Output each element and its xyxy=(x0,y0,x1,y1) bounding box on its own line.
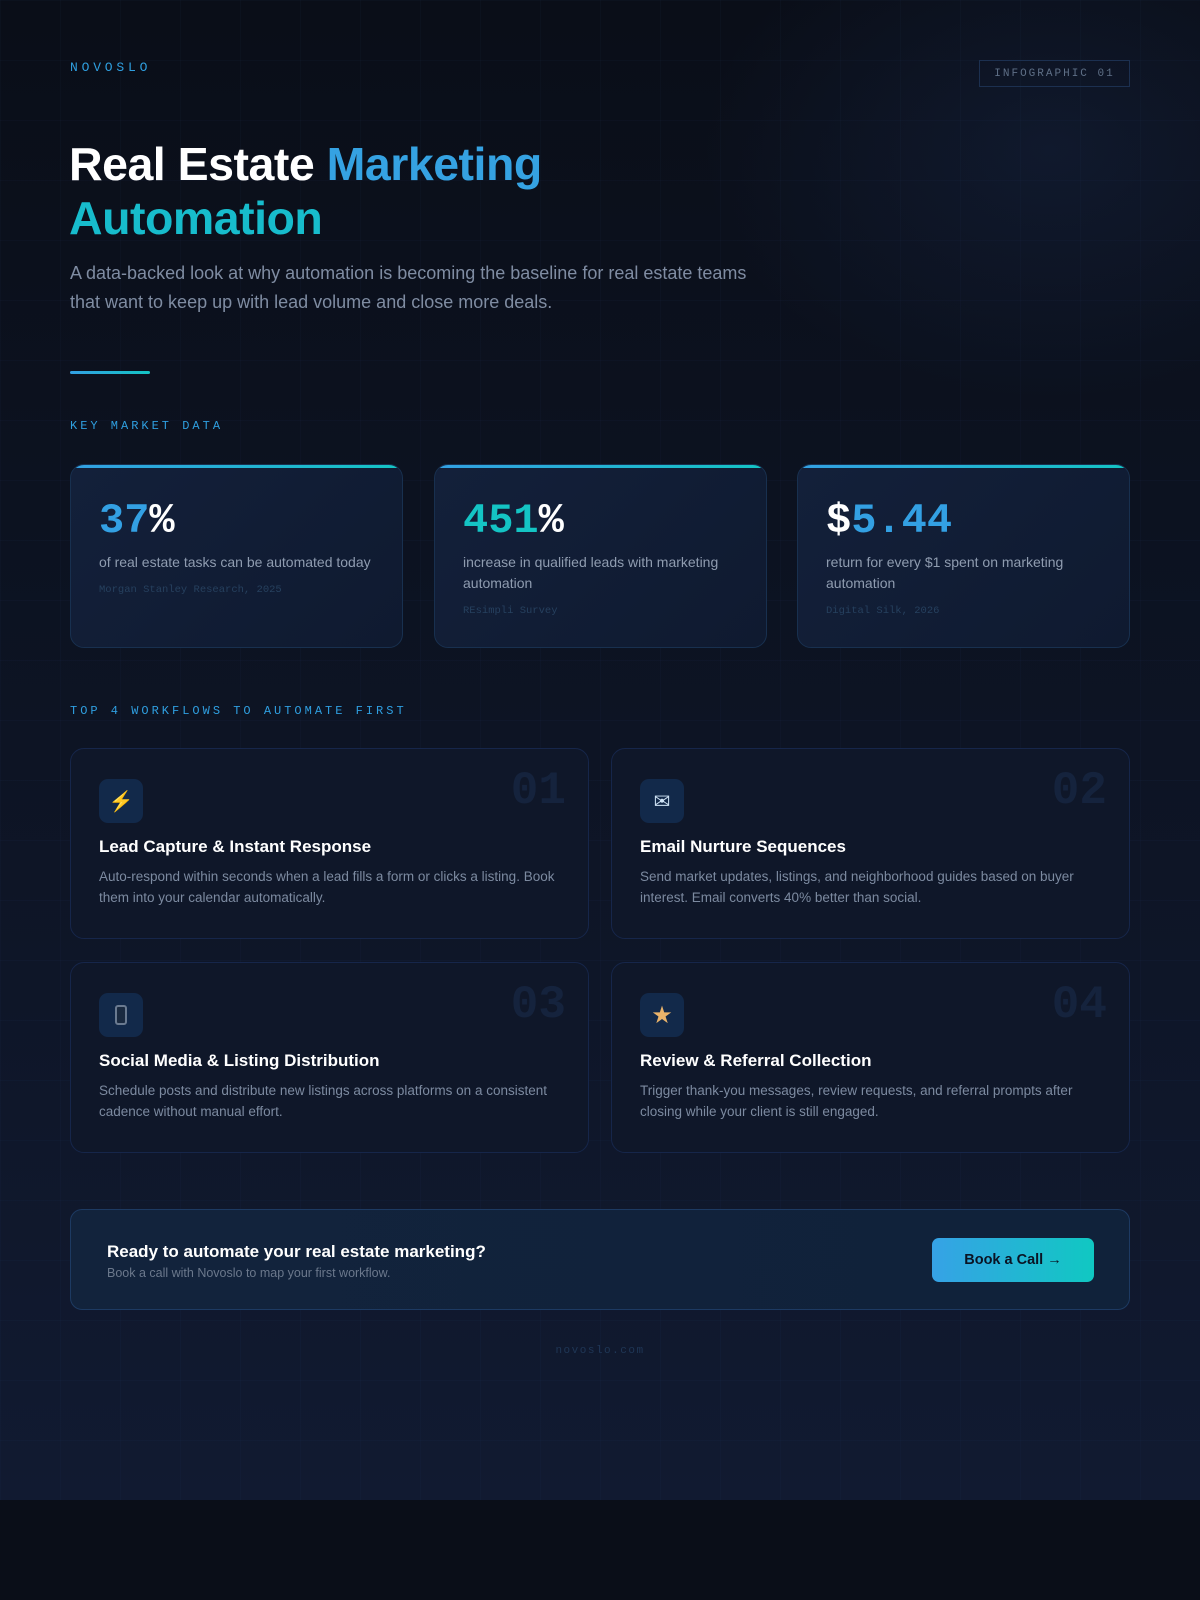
logo: NOVOSLO xyxy=(70,60,151,75)
workflow 04: Trigger thank-you messages, review requests, and referral prompts after closing while your client is still engaged. xyxy=(640,1083,1072,1118)
workflow 02: 02 xyxy=(1052,765,1107,817)
icon: phone xyxy=(99,993,143,1037)
title: Real Estate Marketing xyxy=(69,138,542,190)
workflow 02 xyxy=(611,748,1130,939)
badge: infographic 01 xyxy=(979,60,1130,87)
stat card: 37%: 37% xyxy=(99,497,175,545)
accent line xyxy=(70,371,150,374)
stat card: 451%: REsimpli Survey xyxy=(463,605,558,617)
stat card: $5.44: Digital Silk, 2026 xyxy=(826,605,939,617)
button: Book a Call → xyxy=(964,1252,1062,1268)
section heading: workflows: TOP 4 WORKFLOWS TO AUTOMATE FIRST xyxy=(70,704,407,718)
icon: star xyxy=(640,993,684,1037)
stat card: 37%: Morgan Stanley Research, 2025 xyxy=(99,584,282,596)
icon: lightning xyxy=(99,779,143,823)
stat card: 451% xyxy=(434,464,767,648)
icon: email xyxy=(640,779,684,823)
badge: infographic 01: INFOGRAPHIC 01 xyxy=(994,68,1115,80)
stat card: 451%: 451% xyxy=(463,497,564,545)
stat card: 451%: increase in qualified leads with marketing automation xyxy=(463,554,718,591)
stat card: 37% xyxy=(70,464,403,648)
workflow 03: Social Media & Listing Distribution xyxy=(99,1051,380,1070)
button xyxy=(932,1238,1094,1282)
workflow 03 xyxy=(70,962,589,1153)
section heading: key market data: KEY MARKET DATA xyxy=(70,419,223,433)
title xyxy=(69,138,542,244)
stat card: $5.44: $5.44 xyxy=(826,497,952,545)
stat card: $5.44: return for every $1 spent on marketing automation xyxy=(826,554,1063,591)
CTA panel xyxy=(70,1209,1130,1310)
icon: lightning: ⚡ xyxy=(109,790,133,812)
workflow 04: 04 xyxy=(1052,979,1107,1031)
subtitle: A data-backed look at why automation is becoming the baseline for real estate teams that want to keep up with lead volume and close more deals. xyxy=(70,263,746,312)
stat card: 37%: of real estate tasks can be automated today xyxy=(99,554,371,570)
workflow 01: 01 xyxy=(511,765,566,817)
workflow 04 xyxy=(611,962,1130,1153)
icon: email: ✉ xyxy=(654,790,670,812)
icon: star: ★ xyxy=(651,1002,673,1028)
title: Automation xyxy=(69,192,322,244)
workflow 02: Email Nurture Sequences xyxy=(640,837,846,856)
workflow 03: Schedule posts and distribute new listings across platforms on a consistent cadence without manual effort. xyxy=(99,1083,547,1118)
CTA subtext: Book a call with Novoslo to map your first workflow. xyxy=(107,1266,390,1280)
footer: novoslo.com xyxy=(555,1345,645,1357)
stat card: $5.44 xyxy=(797,464,1130,648)
workflow 02: Send market updates, listings, and neighborhood guides based on buyer interest. Email converts 40% better than social. xyxy=(640,869,1074,904)
workflow 04: Review & Referral Collection xyxy=(640,1051,871,1070)
workflow 01 xyxy=(70,748,589,939)
CTA heading: Ready to automate your real estate marketing? xyxy=(107,1242,486,1261)
workflow 01: Lead Capture & Instant Response xyxy=(99,837,371,856)
workflow 01: Auto-respond within seconds when a lead fills a form or clicks a listing. Book them into your calendar automatically. xyxy=(99,869,554,904)
workflow 03: 03 xyxy=(511,979,566,1031)
